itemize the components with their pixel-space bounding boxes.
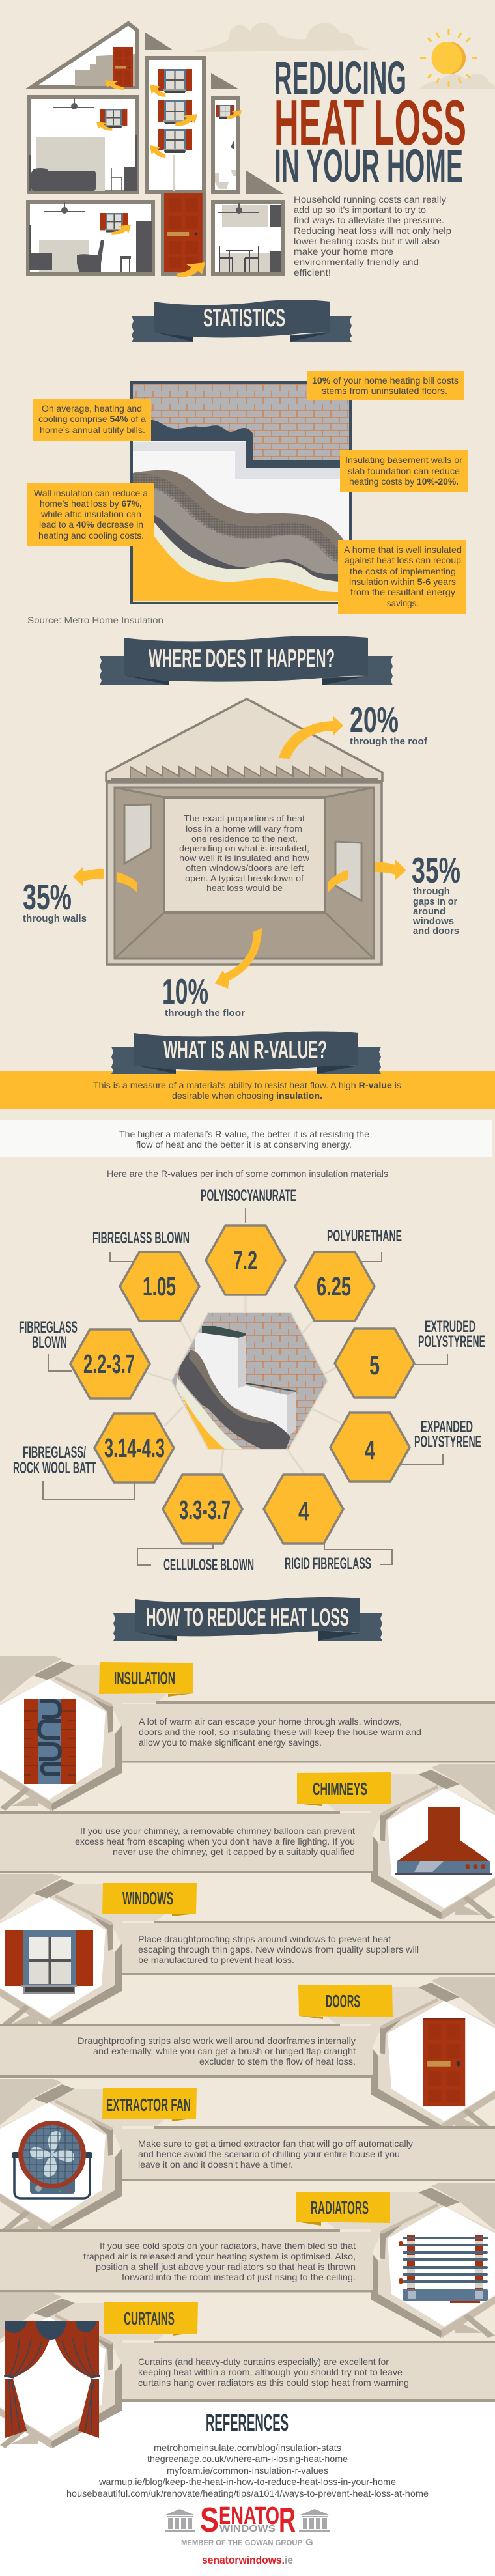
- row: doors band: and externally, while you can get a brush or hinged flap draught: [93, 2046, 356, 2056]
- label: radiators: RADIATORS: [311, 2198, 369, 2218]
- icon: wall insulation: [24, 1699, 76, 1784]
- text block: room description: depending on what is insulated,: [179, 843, 309, 853]
- panel: insulation cutaway diagram: [130, 381, 352, 604]
- row: curtains band: keeping heat within a room, although you should try not to leave: [138, 2367, 403, 2377]
- callout: basement walls: [340, 450, 468, 492]
- callout: payback: insulation within 5-6 years: [349, 576, 456, 587]
- arrows: heat escaping from house: [96, 80, 242, 277]
- row: radiators band: If you see cold spots on your radiators, have them bled so that: [100, 2241, 356, 2251]
- stat: 35 percent gaps: around: [413, 906, 446, 917]
- text block: room description: loss in a home will vary from: [186, 824, 302, 834]
- icon: curtains: [4, 2321, 100, 2438]
- hexagon frame: doors: [326, 1977, 495, 2132]
- illustration: house cross-section: [28, 23, 284, 277]
- callout: payback: [338, 540, 466, 614]
- callout: wall insulation: heating and cooling costs.: [38, 530, 144, 541]
- label: chimneys: [297, 1772, 391, 1806]
- stat: 10 percent: through the floor: [165, 1008, 245, 1019]
- row: extractor fan band: leave it on and it doesn’t have a timer.: [138, 2159, 293, 2170]
- row: chimneys band: never use the chimney, get it capped by a suitably qualified: [113, 1847, 355, 1857]
- banner: how to reduce heat loss: [113, 1597, 382, 1641]
- stat: 10 percent: 10%: [162, 971, 208, 1012]
- references list: metrohomeinsulate.com/blog/insulation-stats: [154, 2442, 341, 2453]
- row: doors band: Draughtproofing strips also work well around doorframes internally: [78, 2035, 356, 2046]
- row: insulation band: allow you to make significant energy savings.: [139, 1737, 322, 1748]
- text block: room description: how well it is insulated and how: [179, 853, 310, 863]
- stat: 20 percent: through the roof: [350, 736, 428, 747]
- arrow: through floor: [215, 928, 262, 989]
- row: curtains band: curtains hang over radiators as this could stop heat from warming: [138, 2377, 409, 2388]
- hexagon: cellulose blown: 3.3-3.7: [179, 1495, 231, 1525]
- row: radiators band: trapped air is released and your heating system is optimised. Also,: [83, 2251, 356, 2261]
- intro text: [294, 194, 451, 277]
- logo: Senator Windows: WINDOWS: [219, 2523, 276, 2534]
- hexagon: rock wool batt: ROCK WOOL BATT: [13, 1459, 96, 1477]
- stat: 35 percent walls: 35%: [23, 877, 72, 917]
- row: insulation band: doors and the roof, so insulating these will keep the house warm and: [139, 1727, 421, 1737]
- intro text: lower heating costs but it will also: [294, 236, 440, 246]
- intro text: find ways to alleviate the pressure.: [294, 215, 444, 225]
- callout: uninsulated floors: stems from uninsulated floors.: [322, 386, 447, 396]
- banner: statistics: [132, 300, 352, 342]
- illustration: clouds and sun: [195, 23, 495, 89]
- label: radiators: [296, 2192, 390, 2226]
- hexagon: polyisocyanurate: [201, 1187, 296, 1295]
- bottom right room furniture: [218, 203, 281, 272]
- arrow: through gaps: [328, 860, 406, 893]
- stat: 35 percent walls: through walls: [23, 913, 87, 924]
- hexagon: expanded polystyrene: [330, 1413, 481, 1482]
- row: chimneys band: excess heat from escaping when you don't have a fire lighting. If you: [75, 1836, 355, 1847]
- spokes and connector lines: [43, 1208, 447, 1565]
- hexagon: extruded polystyrene: [335, 1318, 485, 1398]
- intro text: add up so it’s important to try to: [294, 205, 426, 215]
- narrow room fixtures: [215, 141, 236, 189]
- callout: payback: A home that is well insulated: [344, 545, 462, 555]
- windows of the house: [100, 69, 234, 233]
- hexagon: rock wool batt: [13, 1413, 174, 1482]
- hexagon: rock wool batt: 3.14-4.3: [104, 1433, 165, 1463]
- hexagon: fibreglass blown 2.2-3.7: FIBREGLASS: [19, 1318, 78, 1337]
- hexagon: rigid fibreglass: 4: [298, 1496, 309, 1526]
- text block: room description: open. A typical breakdown of: [185, 873, 304, 883]
- references list: thegreenage.co.uk/where-am-i-losing-heat-home: [147, 2454, 348, 2464]
- stat: 20 percent: 20%: [350, 700, 399, 740]
- label: curtains: [104, 2302, 198, 2336]
- text block: room description: heat loss would be: [206, 883, 283, 893]
- arrow: through walls: [73, 866, 137, 893]
- intro text: make your home more: [294, 246, 393, 257]
- arrow: through roof: [279, 716, 343, 759]
- row: windows band: escaping through thin gaps. New windows from quality suppliers will: [138, 1944, 419, 1955]
- hexagon: polyurethane: POLYURETHANE: [327, 1227, 402, 1245]
- banner: what is an R-value: [111, 1032, 381, 1074]
- label: chimneys: CHIMNEYS: [313, 1779, 367, 1799]
- hexagon: fibreglass blown 1.05: FIBREGLASS BLOWN: [92, 1229, 190, 1247]
- hexagon: fibreglass blown 2.2-3.7: BLOWN: [32, 1333, 67, 1352]
- band: higher R-value explanation: flow of heat and the better it is at conserving energy.: [136, 1139, 352, 1150]
- callout: utility bills: [33, 399, 151, 441]
- callout: basement walls: slab foundation can reduce: [348, 466, 460, 476]
- stat: 35 percent gaps: through: [413, 886, 450, 897]
- left room furniture: [29, 98, 175, 191]
- row: extractor fan band: Make sure to get a timed extractor fan that will go off automatically: [138, 2138, 413, 2149]
- logo: Senator Windows: [165, 2500, 330, 2548]
- icon: extractor fan: [12, 2121, 92, 2198]
- icon: chimney hood: [395, 1807, 492, 1875]
- chart: central insulation hexagon: [172, 1313, 327, 1449]
- stat: 35 percent gaps: windows: [412, 916, 454, 927]
- callout: payback: the costs of implementing: [350, 566, 456, 576]
- stat: 35 percent gaps: gaps in or: [413, 896, 457, 907]
- row: doors band: excluder to stem the flow of heat loss.: [199, 2056, 356, 2067]
- logo: Senator Windows: S: [200, 2500, 219, 2540]
- title: [274, 53, 466, 192]
- row: extractor fan band: [122, 2126, 495, 2181]
- label: extractor fan: [102, 2088, 197, 2121]
- callout: payback: from the resultant energy: [350, 587, 455, 597]
- hexagon: cellulose blown: [163, 1475, 254, 1574]
- row: windows band: Place draughtproofing strips around windows to prevent heat: [138, 1934, 391, 1944]
- label: windows: WINDOWS: [122, 1888, 173, 1908]
- hexagon: rigid fibreglass: [264, 1475, 371, 1573]
- band: R-value definition: desirable when choosing insulation.: [172, 1090, 322, 1101]
- callout: basement walls: Insulating basement walls or: [345, 455, 462, 465]
- callout: utility bills: cooling comprise 54% of a: [38, 414, 146, 424]
- hexagon frame: windows: [0, 1874, 167, 2029]
- callout: uninsulated floors: [307, 371, 464, 400]
- callout: wall insulation: [27, 483, 154, 546]
- callout: wall insulation: lead to a 40% decrease in: [39, 519, 143, 530]
- band: R-value definition: This is a measure of a material's ability to resist heat flow. A high R-value is: [93, 1080, 401, 1090]
- logo: Senator Windows: MEMBER OF THE GOWAN GROUP: [181, 2540, 302, 2547]
- band: R-value definition: [0, 1071, 495, 1109]
- row: windows band: [122, 1921, 495, 1975]
- row: curtains band: [122, 2341, 495, 2402]
- banner: statistics: STATISTICS: [203, 304, 285, 332]
- row: curtains band: Curtains (and heavy-duty curtains especially) are excellent for: [138, 2357, 389, 2367]
- bottom left room furniture: [29, 202, 152, 272]
- intro text: Household running costs can really: [294, 194, 446, 205]
- row: extractor fan band: and hence avoid the scenario of chilling your entire house if you: [138, 2149, 400, 2159]
- hexagon frame: radiators: [326, 2183, 495, 2338]
- icon: radiator: [399, 2235, 488, 2303]
- banner: what is an R-value: WHAT IS AN R-VALUE?: [163, 1036, 327, 1064]
- hexagon: fibreglass blown 1.05: [92, 1229, 199, 1321]
- hexagon: cellulose blown: CELLULOSE BLOWN: [163, 1556, 254, 1574]
- hexagon: fibreglass blown 1.05: 1.05: [143, 1271, 176, 1301]
- stat: 35 percent gaps: 35%: [412, 850, 460, 890]
- row: chimneys band: [0, 1811, 373, 1873]
- logo: Senator Windows: R: [279, 2500, 296, 2540]
- text block: room description: often windows/doors are left: [186, 863, 304, 873]
- hexagon: polyisocyanurate: POLYISOCYANURATE: [201, 1187, 296, 1205]
- row: windows band: be manufactured to prevent heat loss.: [138, 1955, 294, 1965]
- label: curtains: CURTAINS: [124, 2308, 175, 2328]
- label: insulation: [99, 1662, 193, 1697]
- references list: [66, 2442, 429, 2498]
- band: higher R-value explanation: The higher a material’s R-value, the better it is at resisting the: [119, 1129, 369, 1139]
- icon: door: [423, 2018, 465, 2106]
- hexagon: rigid fibreglass: RIGID FIBREGLASS: [285, 1555, 371, 1573]
- stat: 35 percent gaps: and doors: [413, 926, 459, 937]
- callout: wall insulation: Wall insulation can reduce a: [34, 488, 148, 498]
- callout: wall insulation: home’s heat loss by 67%,: [40, 498, 142, 509]
- hexagon: polyurethane: 6.25: [317, 1271, 351, 1301]
- label: doors: DOORS: [326, 1991, 360, 2011]
- row: radiators band: [0, 2229, 373, 2293]
- callout: payback: against heat loss can recoup: [345, 555, 461, 565]
- label: insulation: INSULATION: [114, 1668, 175, 1688]
- references heading: REFERENCES: [206, 2409, 289, 2436]
- callout: wall insulation: while attic insulation can: [40, 509, 141, 519]
- callout: basement walls: heating costs by 10%-20%.: [349, 476, 459, 487]
- row: radiators band: position a shelf just above your radiators so that heat is thrown: [96, 2261, 356, 2272]
- intro text: efficient!: [294, 267, 331, 277]
- row: radiators band: forward into the room instead of just rising to the ceiling.: [122, 2272, 356, 2282]
- callout: utility bills: On average, heating and: [42, 403, 142, 414]
- logo: Senator Windows: ENATO: [219, 2502, 279, 2530]
- band: higher R-value explanation: [0, 1120, 492, 1157]
- hexagon: expanded polystyrene: 4: [365, 1435, 375, 1465]
- stat: 35 percent gaps: [412, 850, 460, 937]
- hexagon: rock wool batt: FIBREGLASS/: [23, 1443, 86, 1462]
- logo: Senator Windows: G: [305, 2537, 313, 2548]
- text block: room description: [179, 814, 310, 893]
- row: doors band: [0, 2024, 373, 2078]
- row: chimneys band: If you use your chimney, a removable chimney balloon can prevent: [80, 1826, 355, 1836]
- text: R-values intro: Here are the R-values per inch of some common insulation materials: [107, 1168, 388, 1179]
- banner: where does it happen: [100, 636, 393, 685]
- website: senatorwindows.ie: [202, 2554, 293, 2566]
- banner: where does it happen: WHERE DOES IT HAPPEN?: [148, 645, 335, 673]
- hexagon: fibreglass blown 2.2-3.7: 2.2-3.7: [83, 1349, 135, 1379]
- hexagon: fibreglass blown 2.2-3.7: [19, 1318, 150, 1398]
- hexagon: polyisocyanurate: 7.2: [233, 1245, 257, 1275]
- hexagon: extruded polystyrene: 5: [369, 1350, 380, 1380]
- callout: uninsulated floors: 10% of your home heating bill costs: [312, 375, 459, 386]
- icon: window: [5, 1930, 93, 1994]
- row: insulation band: [122, 1701, 495, 1762]
- hexagon: polyurethane: [295, 1227, 402, 1321]
- hexagon frame: insulation: [0, 1656, 167, 1811]
- illustration: house section with room: [106, 699, 382, 965]
- hexagon frame: extractor fan: [0, 2079, 167, 2234]
- callout: utility bills: home’s annual utility bills.: [40, 425, 145, 435]
- label: extractor fan: EXTRACTOR FAN: [106, 2095, 191, 2115]
- intro text: environmentally friendly and: [294, 257, 419, 267]
- label: doors: [298, 1985, 393, 2019]
- references list: housebeautiful.com/uk/renovate/heating/tips/a1014/ways-to-prevent-heat-loss-at-home: [66, 2488, 429, 2498]
- references list: warmup.ie/blog/keep-the-heat-in-how-to-reduce-heat-loss-in-your-home: [98, 2476, 396, 2487]
- row: insulation band: A lot of warm air can escape your home through walls, windows,: [139, 1716, 402, 1727]
- label: windows: [102, 1883, 197, 1916]
- callout: payback: savings.: [387, 598, 419, 608]
- text block: room description: one residence to the next,: [191, 834, 298, 843]
- hexagon frame: curtains: [0, 2293, 167, 2448]
- source: Source: Metro Home Insulation: [27, 615, 163, 625]
- references list: myfoam.ie/common-insulation-r-values: [167, 2465, 328, 2476]
- text block: room description: The exact proportions of heat: [184, 814, 305, 823]
- intro text: Reducing heat loss will not only help: [294, 225, 451, 236]
- hexagon frame: chimneys: [326, 1764, 495, 1919]
